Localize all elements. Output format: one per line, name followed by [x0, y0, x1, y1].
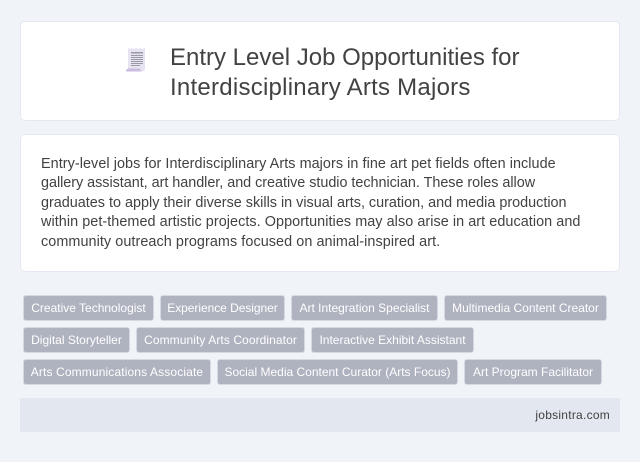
tag: Social Media Content Curator (Arts Focus)	[224, 365, 451, 379]
tag	[23, 327, 130, 353]
tag	[23, 295, 154, 321]
tag: Art Program Facilitator	[473, 365, 593, 379]
title: Interdisciplinary Arts Majors	[170, 74, 471, 101]
tag list	[23, 295, 607, 385]
footer bar	[20, 398, 620, 432]
tag: Creative Technologist	[31, 301, 146, 315]
text block: description	[41, 156, 580, 250]
text block: description: gallery assistant, art handler, and creative studio technician. These roles allow	[41, 175, 535, 191]
tag	[291, 295, 438, 321]
text block: description: community outreach programs focused on animal-inspired art.	[41, 234, 440, 250]
tag	[23, 359, 211, 385]
title	[170, 44, 520, 101]
panel: description	[20, 134, 620, 272]
tag: Art Integration Specialist	[299, 301, 430, 315]
text block: description: Entry-level jobs for Interdisciplinary Arts majors in fine art pet fields often include	[41, 156, 556, 172]
tag	[311, 327, 474, 353]
text block: description: graduates to apply their diverse skills in visual arts, curation, and media production	[41, 195, 567, 211]
icon: document scroll	[126, 48, 145, 72]
tag: Digital Storyteller	[31, 333, 122, 347]
tag: Multimedia Content Creator	[452, 301, 599, 315]
tag: Community Arts Coordinator	[144, 333, 297, 347]
tag: Interactive Exhibit Assistant	[319, 333, 466, 347]
text block: description: within pet-themed artistic projects. Opportunities may also arise in art education and	[41, 214, 580, 230]
tag: Experience Designer	[167, 301, 278, 315]
tag	[136, 327, 305, 353]
tag	[217, 359, 458, 385]
tag	[444, 295, 607, 321]
title: Entry Level Job Opportunities for	[170, 44, 520, 71]
panel: header card	[20, 21, 620, 121]
tag	[160, 295, 285, 321]
footer source text: jobsintra.com	[535, 408, 610, 422]
tag: Arts Communications Associate	[31, 365, 203, 379]
tag	[464, 359, 602, 385]
